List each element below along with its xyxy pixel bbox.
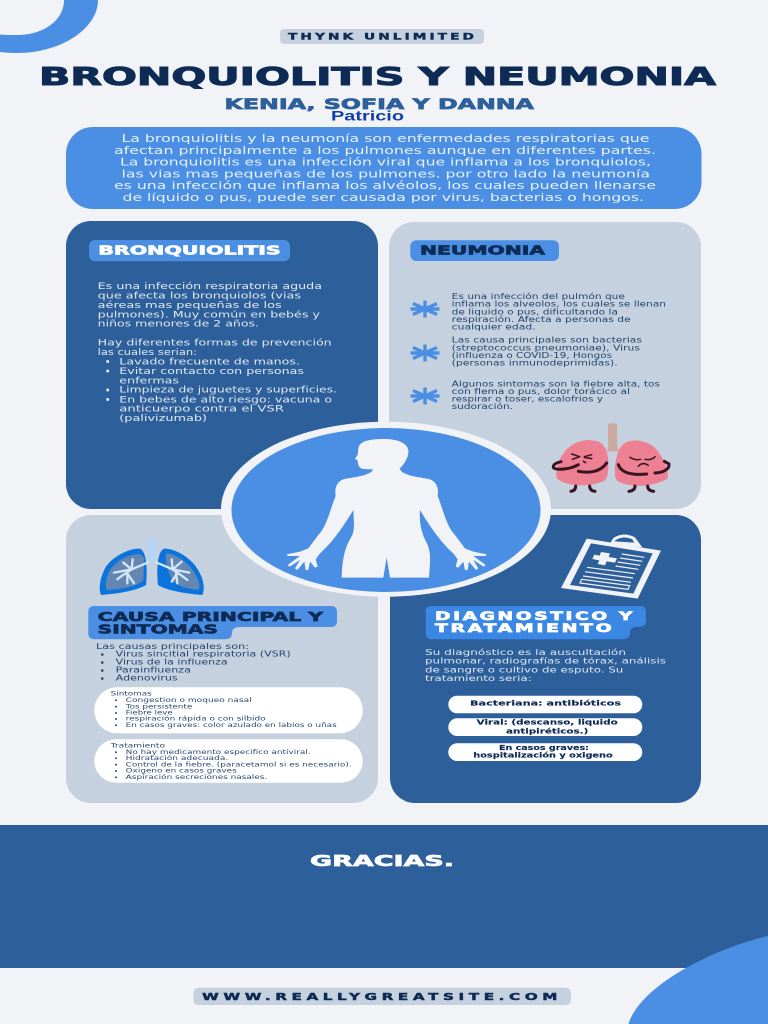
intro panel: de líquido o pus, puede ser causada por virus, bacterias o hongos. bbox=[122, 192, 644, 204]
footer band bbox=[0, 825, 768, 968]
text: definition: niños menores de 2 años. bbox=[98, 320, 259, 330]
callout: bacteriana: Bacteriana: antibióticos bbox=[470, 698, 622, 707]
website badge bbox=[194, 988, 571, 1005]
panel: causa principal y sintomas bbox=[66, 515, 378, 803]
subtitle name: Patricio bbox=[331, 108, 404, 124]
authors: KENIA, SOFIA Y DANNA bbox=[224, 97, 535, 113]
heading: causa principal y sintomas: SINTOMAS bbox=[98, 622, 218, 636]
text: diagnosis: pulmonar, radiografías de tórax, análisis bbox=[425, 656, 666, 666]
header badge: THYNK UNLIMITED bbox=[288, 32, 477, 42]
callout: casos graves bbox=[448, 743, 642, 761]
icon: cartoon lungs bbox=[553, 423, 669, 491]
heading: diagnostico y tratamiento: DIAGNOSTICO Y bbox=[435, 609, 635, 623]
central body badge bbox=[221, 422, 551, 597]
decorative circle bottom-right bbox=[628, 936, 768, 1024]
callout: sintomas bbox=[94, 687, 363, 733]
intro panel: es una infección que inflama los alvéolos, los cuales pueden llenarse bbox=[114, 180, 656, 192]
text: causes: (streptococcus pneumoniae), Virus bbox=[452, 343, 640, 352]
callout: sintomas: Congestion o moqueo nasal bbox=[126, 697, 252, 704]
text: causes list: Parainfluenza bbox=[116, 665, 191, 675]
text: causes list bbox=[96, 641, 291, 683]
text: definition: Es una infección respiratoria aguda bbox=[98, 281, 322, 292]
heading: bronquiolitis bbox=[89, 240, 290, 261]
text: prevention list: Hay diferentes formas de prevención bbox=[98, 338, 332, 349]
heading: causa principal y sintomas bbox=[88, 606, 337, 639]
callout: tratamiento: Hidratación adecuada. bbox=[126, 754, 228, 762]
icon: blue lungs bbox=[100, 539, 204, 595]
text: definition: aéreas mas pequeñas de los bbox=[98, 300, 282, 311]
text: prevention list: enfermas bbox=[119, 376, 180, 386]
heading: neumonia: NEUMONIA bbox=[420, 243, 546, 257]
callout: tratamiento: Control de la fiebre. (paracetamol si es necesario). bbox=[126, 761, 352, 768]
callout: sintomas: Fiebre leve bbox=[126, 710, 173, 717]
header badge bbox=[280, 29, 484, 44]
heading: bronquiolitis: BRONQUIOLITIS bbox=[98, 244, 281, 258]
text: definition bbox=[452, 292, 666, 331]
text: causes list: Virus de la influenza bbox=[116, 657, 228, 667]
text: definition: Es una infección del pulmón que bbox=[452, 292, 626, 301]
text: symptoms: respirar o toser, escalofrios y bbox=[452, 395, 604, 404]
callout: tratamiento: No hay medicamento especifico antiviral. bbox=[126, 749, 311, 756]
panel: bronquiolitis bbox=[66, 221, 378, 509]
text: prevention list: las cuales serian: bbox=[98, 348, 197, 358]
text: definition: inflama los alveolos, los cuales se llenan bbox=[452, 300, 666, 309]
heading: diagnostico y tratamiento: TRATAMIENTO bbox=[435, 621, 614, 635]
callout: sintomas: Tos persistente bbox=[124, 703, 193, 710]
text: diagnosis: de sangre o cultivo de esputo. Su bbox=[425, 664, 623, 674]
callout: tratamiento: Oxigeno en casos graves bbox=[126, 768, 237, 775]
text: gracias: GRACIAS. bbox=[310, 852, 454, 870]
text: diagnosis bbox=[425, 647, 666, 683]
text: symptoms bbox=[452, 380, 660, 411]
callout: tratamiento bbox=[94, 739, 363, 783]
callout: viral bbox=[448, 717, 642, 736]
callout: sintomas: En casos graves: color azulado en labios o uñas bbox=[126, 722, 337, 729]
text: causes list: Adenovirus bbox=[116, 673, 178, 683]
text: definition: pulmones). Muy común en bebés y bbox=[98, 309, 320, 320]
icon: asterisk 2 bbox=[410, 344, 440, 362]
text: definition: respiración. Afecta a personas de bbox=[452, 315, 631, 324]
text: diagnosis: tratamiento seria: bbox=[425, 673, 532, 683]
decorative ring top-left bbox=[0, 0, 98, 53]
callout: tratamiento: Aspiración secreciones nasales. bbox=[126, 773, 267, 781]
text: causes bbox=[452, 336, 642, 368]
text: symptoms: sudoración. bbox=[452, 402, 513, 411]
text: definition: cualquier edad. bbox=[452, 322, 536, 331]
text: prevention list: Evitar contacto con personas bbox=[119, 367, 305, 377]
heading: causa principal y sintomas: CAUSA PRINCIPAL Y bbox=[98, 609, 325, 624]
text: symptoms: Algunos sintomas son la fiebre alta, tos bbox=[452, 380, 660, 389]
text: diagnosis: Su diagnóstico es la auscultación bbox=[425, 647, 626, 657]
callout: casos graves: En casos graves: bbox=[499, 743, 589, 752]
text: prevention list: En bebes de alto riesgo: vacuna o bbox=[119, 395, 332, 405]
text: causes: Las causa principales son bacterias bbox=[452, 336, 642, 345]
text: definition bbox=[98, 281, 322, 330]
text: prevention list bbox=[98, 338, 337, 424]
intro panel: las vias mas pequeñas de los pulmones. por otro lado la neumonía bbox=[122, 168, 650, 180]
callout: viral: Viral: (descanso, liquido bbox=[477, 717, 618, 726]
panel: diagnostico y tratamiento bbox=[390, 515, 701, 803]
text: prevention list: (palivizumab) bbox=[119, 414, 207, 424]
intro panel: La bronquiolitis es una infección viral que inflama a los bronquiolos, bbox=[120, 156, 651, 168]
callout: bacteriana bbox=[448, 696, 642, 713]
icon: asterisk 3 bbox=[410, 388, 440, 404]
heading: diagnostico y tratamiento bbox=[426, 606, 646, 639]
intro panel: afectan principalmente a los pulmones aunque en diferentes partes. bbox=[114, 145, 656, 157]
callout: tratamiento: Tratamiento bbox=[109, 742, 165, 749]
icon: human silhouette bbox=[287, 439, 487, 578]
panel: neumonia bbox=[389, 222, 701, 509]
text: prevention list: anticuerpo contra el VSR bbox=[119, 405, 284, 415]
text: causes list: Las causas principales son: bbox=[96, 641, 249, 651]
text: causes list: Virus sincitial respiratoria (VSR) bbox=[116, 649, 291, 659]
callout: viral: antipiréticos.) bbox=[506, 726, 588, 735]
heading: neumonia bbox=[410, 240, 559, 261]
intro panel: La bronquiolitis y la neumonía son enfermedades respiratorias que bbox=[122, 133, 650, 145]
callout: sintomas: Sintomas bbox=[111, 691, 152, 698]
title: BRONQUIOLITIS Y NEUMONIA bbox=[39, 62, 716, 91]
intro panel bbox=[66, 127, 702, 209]
icon: clipboard bbox=[561, 534, 661, 599]
callout: sintomas: respiración rápida o con silbido bbox=[126, 715, 266, 723]
text: symptoms: con flema o pus, dolor torácico al bbox=[452, 387, 630, 396]
text: prevention list: Lavado frecuente de manos. bbox=[119, 357, 300, 367]
text: definition: de liquido o pus, dificultando la bbox=[452, 307, 618, 316]
website badge: WWW.REALLYGREATSITE.COM bbox=[202, 992, 562, 1003]
text: definition: que afecta los bronquiolos (vias bbox=[98, 292, 302, 302]
text: causes: (personas inmunodeprimidas). bbox=[452, 359, 618, 368]
callout: casos graves: hospitalización y oxigeno bbox=[473, 751, 613, 760]
text: prevention list: Limpieza de juguetes y superficies. bbox=[119, 386, 337, 396]
text: causes: (influenza o COVID-19, Hongos bbox=[452, 351, 612, 360]
icon: asterisk 1 bbox=[410, 300, 440, 318]
